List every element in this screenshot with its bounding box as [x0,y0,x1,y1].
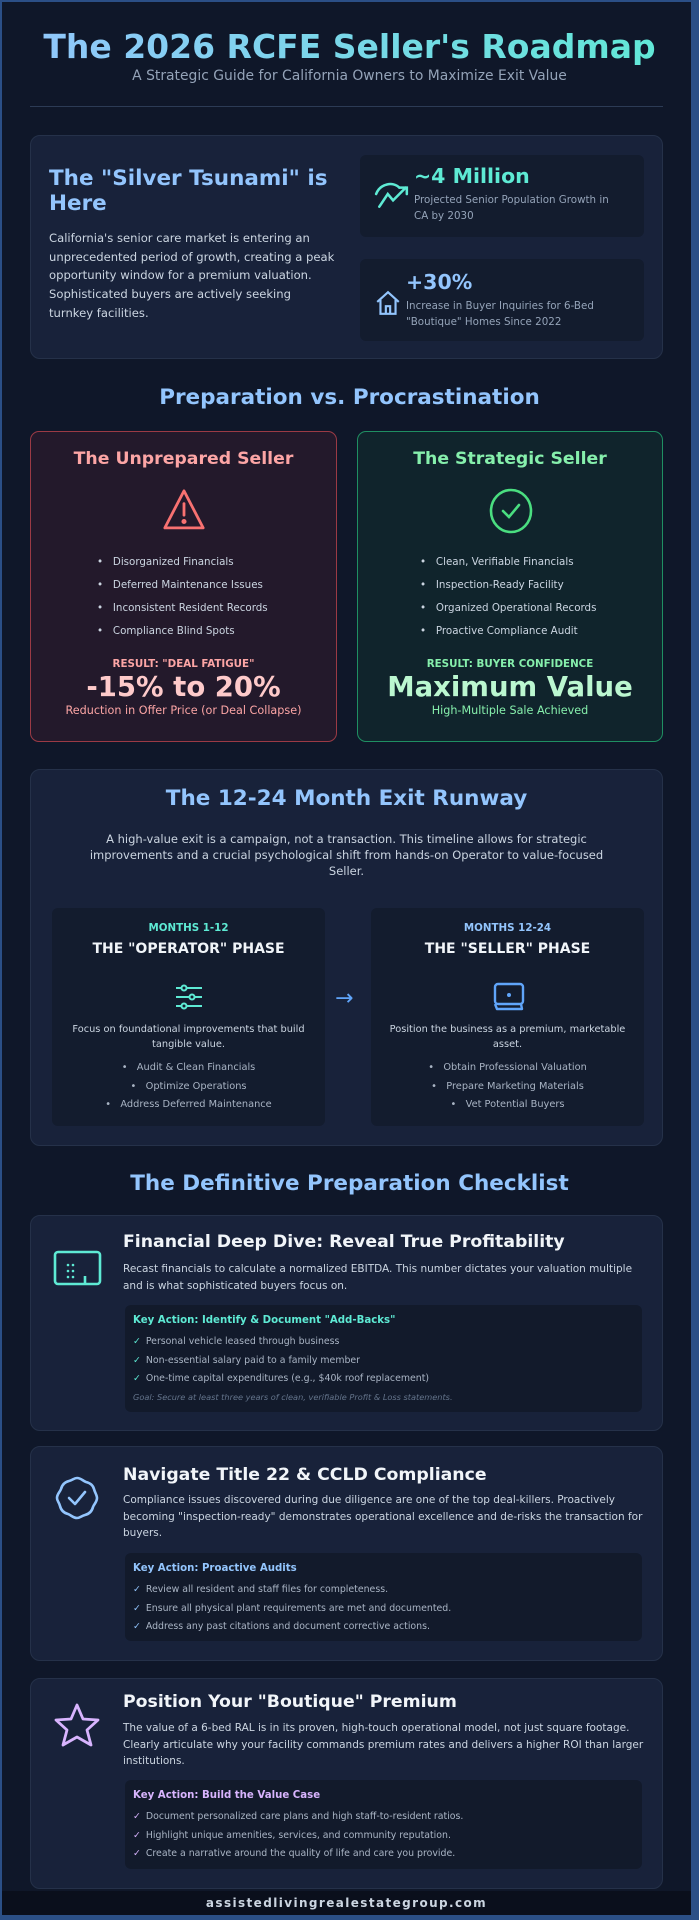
icon: check circle [490,488,532,534]
subtitle: A Strategic Guide for California Owners to Maximize Exit Value [132,68,567,84]
icon: house [376,290,400,315]
panel: operator phase: MONTHS 1-12 [148,922,229,934]
text: Compliance issues discovered during due diligence are one of the top deal-killers. Proactively becoming "inspection-ready" demonstrates operational excellence and de-risks the transaction for buyers. [123,1494,642,1539]
heading: Navigate Title 22 & CCLD Compliance [123,1465,487,1485]
panel: operator phase: Focus on foundational improvements that build tangible value. [72,1024,305,1050]
result: RESULT: BUYER CONFIDENCE [427,658,593,670]
key action box: ✓ Personal vehicle leased through business [133,1336,339,1347]
footer: assistedlivingrealestategroup.com [206,1896,487,1910]
key action box: ✓ Highlight unique amenities, services, and community reputation. [133,1830,451,1840]
result: Maximum Value [387,671,633,703]
result: -15% to 20% [86,671,281,703]
panel: seller phase: • Prepare Marketing Materials [431,1080,584,1092]
icon: building [54,1250,102,1286]
list: problems: • Compliance Blind Spots [97,625,235,637]
list: strengths: • Inspection-Ready Facility [420,579,564,591]
list: problems: • Deferred Maintenance Issues [97,579,263,591]
panel: seller phase: THE "SELLER" PHASE [425,941,590,957]
stat: 30 percent [360,259,644,341]
key action box: ✓ Ensure all physical plant requirements are met and documented. [133,1602,451,1614]
key action box: ✓ Review all resident and staff files for completeness. [133,1584,388,1595]
list: problems: • Disorganized Financials [97,556,234,568]
result: High-Multiple Sale Achieved [432,704,588,717]
key action box: Key Action: Identify & Document "Add-Backs" [133,1315,395,1326]
panel: operator phase: • Audit & Clean Financials [122,1062,255,1073]
key action box: ✓ Non-essential salary paid to a family member [133,1354,360,1366]
key action box [125,1553,642,1641]
heading: checklist: The Definitive Preparation Checklist [130,1171,569,1196]
result [66,658,301,717]
list: problems: • Inconsistent Resident Records [97,602,268,614]
panel: operator phase: • Optimize Operations [130,1080,247,1092]
text: runway intro: A high-value exit is a campaign, not a transaction. This timeline allows for strategic improvements and a crucial psychological shift from hands-on Operator to value-focused Seller. [90,832,603,878]
text: The value of a 6-bed RAL is in its proven, high-touch operational model, not just square footage. Clearly articulate why your facility commands premium rates and delivers a higher ROI than larger institutions. [123,1722,643,1767]
key action box: Goal: Secure at least three years of clean, verifiable Profit & Loss statements. [133,1392,453,1402]
stat value: +30% [406,270,472,294]
stat: 4 million [360,155,644,237]
panel: operator phase [52,908,325,1126]
result: Reduction in Offer Price (or Deal Collapse) [66,704,301,717]
panel: financial deep dive [30,1215,663,1431]
result [387,658,633,717]
panel: seller phase: • Vet Potential Buyers [451,1099,564,1110]
list: strengths: • Organized Operational Records [420,602,596,614]
heading: Position Your "Boutique" Premium [123,1692,457,1712]
heading: Financial Deep Dive: Reveal True Profitability [123,1232,565,1252]
key action box: Key Action: Proactive Audits [133,1563,297,1574]
heading: The 12-24 Month Exit Runway [166,786,527,811]
stat label: Increase in Buyer Inquiries for 6-Bed "Boutique" Homes Since 2022 [406,300,594,328]
panel: exit runway [30,769,663,1146]
icon: sliders [176,984,202,1010]
stat value: ~4 Million [414,164,530,188]
heading: silver tsunami: The "Silver Tsunami" is Here [49,166,328,216]
panel: seller phase [371,908,644,1126]
list: strengths [420,556,596,637]
panel: seller phase: MONTHS 12-24 [464,922,551,934]
key action box: ✓ One-time capital expenditures (e.g., $40k roof replacement) [133,1373,429,1384]
panel: silver tsunami [30,135,663,359]
key action box: ✓ Address any past citations and document corrective actions. [133,1621,430,1632]
arrow: → [335,986,353,1011]
text: market description: California's senior care market is entering an unprecedented period of growth, creating a peak opportunity window for a premium valuation. Sophisticated buyers are actively seeking turnkey facilities. [49,231,334,320]
key action box: Key Action: Build the Value Case [133,1790,320,1801]
result: RESULT: "DEAL FATIGUE" [113,658,254,670]
key action box: ✓ Create a narrative around the quality of life and care you provide. [133,1848,455,1859]
icon: presentation [494,982,524,1010]
icon: star [54,1704,100,1746]
key action box: ✓ Document personalized care plans and high staff-to-resident ratios. [133,1811,463,1822]
panel: seller phase: • Obtain Professional Valuation [428,1062,587,1073]
panel: seller phase: Position the business as a premium, marketable asset. [390,1024,625,1050]
panel: strategic seller [357,431,663,742]
heading: The Unprepared Seller [74,449,293,469]
heading: The Strategic Seller [413,449,607,469]
footer [2,1891,691,1915]
panel: operator phase: • Address Deferred Maintenance [105,1099,272,1110]
icon: warning [163,489,205,530]
panel: unprepared seller [30,431,337,742]
panel: operator phase: THE "OPERATOR" PHASE [92,941,285,957]
icon: growth [374,182,408,208]
title: The 2026 RCFE Seller's Roadmap [43,27,656,66]
icon: badge check [56,1476,98,1520]
key action box [125,1305,642,1412]
list: problems [97,556,268,637]
stat label: Projected Senior Population Growth in CA by 2030 [414,194,609,222]
list: strengths: • Clean, Verifiable Financials [420,556,574,568]
heading: preparation vs procrastination: Preparation vs. Procrastination [159,385,540,410]
panel: compliance [30,1446,663,1661]
key action box [125,1780,642,1869]
list: strengths: • Proactive Compliance Audit [420,625,578,637]
panel: boutique premium [30,1678,663,1889]
text: Recast financials to calculate a normalized EBITDA. This number dictates your valuation multiple and is what sophisticated buyers focus on. [123,1263,632,1292]
